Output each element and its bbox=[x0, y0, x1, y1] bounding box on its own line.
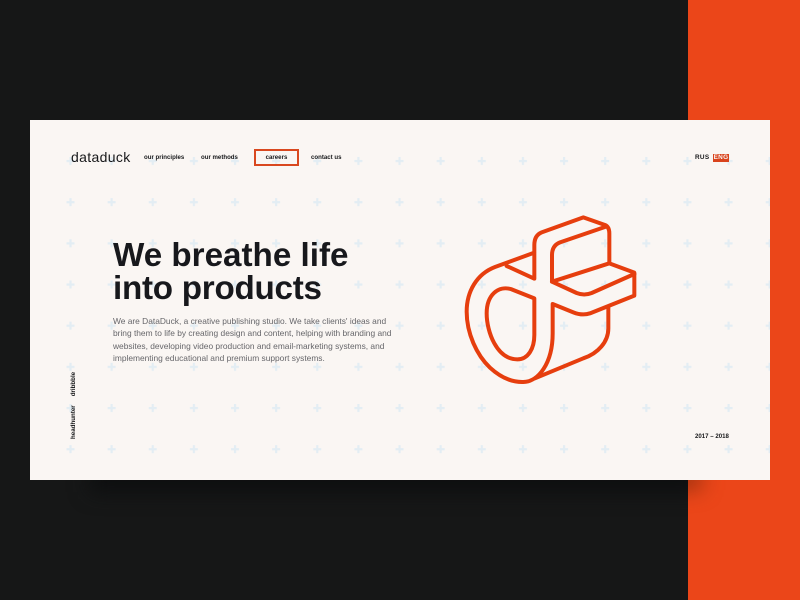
inner hole bbox=[487, 288, 534, 359]
logo wordmark: dataduck bbox=[71, 149, 131, 165]
language switcher: RUS bbox=[695, 154, 709, 161]
careers button: careers bbox=[266, 154, 287, 161]
careers button bbox=[254, 149, 299, 166]
active language: ENG bbox=[714, 154, 728, 160]
description: bring them to life by creating design and content, helping with branding and bbox=[113, 328, 391, 338]
description: websites, developing video production and email-marketing systems, and bbox=[113, 341, 384, 351]
description bbox=[113, 316, 391, 363]
icon: isometric d-f logo bbox=[464, 215, 636, 384]
outer shape bbox=[467, 217, 634, 382]
navigation: our methods bbox=[201, 154, 238, 161]
language switcher bbox=[695, 154, 729, 162]
bottom side bbox=[535, 307, 608, 378]
plus pattern background bbox=[66, 157, 770, 453]
navigation: our principles bbox=[144, 154, 184, 161]
navigation bbox=[144, 149, 342, 166]
headline bbox=[113, 237, 348, 307]
description: We are DataDuck, a creative publishing studio. We take clients' ideas and bbox=[113, 316, 386, 326]
navigation: contact us bbox=[311, 154, 341, 161]
years: 2017 – 2018 bbox=[695, 433, 729, 440]
vertical social links: headhunterdribbble bbox=[70, 372, 77, 439]
headline: into products bbox=[113, 270, 322, 307]
shelf bbox=[552, 274, 634, 294]
card shadow on dark background bbox=[90, 466, 700, 492]
headline: We breathe life bbox=[113, 237, 348, 274]
panel: hero card bbox=[30, 120, 770, 480]
orange side panel bbox=[688, 0, 800, 600]
description: implementing educational and premium support systems. bbox=[113, 353, 325, 363]
stem inner edge bbox=[552, 227, 609, 282]
